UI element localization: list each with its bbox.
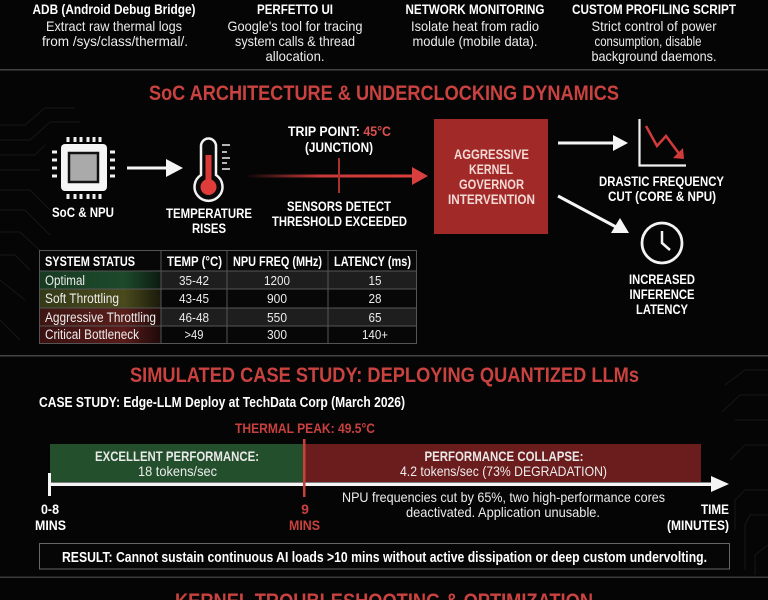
label: drastic frequency cut: [599, 174, 724, 204]
row: critical bottleneck: 140+: [362, 327, 388, 342]
bar: excellent performance: EXCELLENT PERFORMANCE:: [95, 448, 259, 464]
row: critical bottleneck: [45, 327, 388, 342]
label: thermal peak: THERMAL PEAK: 49.5°C: [235, 420, 375, 436]
timeline: performance bars: [50, 444, 701, 482]
label: trip point: (JUNCTION): [305, 140, 373, 155]
arrow: time axis: [48, 473, 729, 496]
row: critical bottleneck: Critical Bottleneck: [45, 327, 139, 342]
row: aggressive throttling: 46-48: [179, 310, 209, 325]
tick label: 9 mins: MINS: [289, 517, 320, 533]
tool: ADB: from /sys/class/thermal/.: [42, 33, 188, 49]
row: aggressive throttling: Aggressive Throttling: [45, 310, 156, 325]
tick label: 9 mins: 9: [301, 501, 309, 517]
icon: falling chart: [640, 119, 686, 166]
note: NPU frequency cut: [342, 489, 665, 520]
row: soft throttling: [45, 291, 382, 306]
label: drastic frequency cut: CUT (CORE & NPU): [608, 189, 716, 204]
bar: performance collapse: [304, 444, 701, 482]
panel: kernel governor box: KERNEL: [469, 162, 513, 177]
axis label: time: TIME: [701, 501, 729, 517]
tool: Perfetto UI: Google's tool for tracing: [228, 18, 362, 34]
panel: kernel governor box: [434, 119, 548, 234]
label: sensors detect: SENSORS DETECT: [287, 199, 392, 214]
label: increased inference latency: INCREASED: [629, 272, 695, 287]
tool: network monitoring: [406, 1, 545, 49]
table header: [45, 254, 411, 269]
tool: network monitoring: module (mobile data).: [412, 33, 538, 49]
label: trip point: TRIP POINT: 45°C: [288, 124, 391, 139]
tick label: 0-8 mins: [35, 501, 66, 533]
tool: Perfetto UI: [228, 1, 362, 64]
label: increased inference latency: [629, 272, 695, 317]
row: optimal: Optimal: [45, 273, 85, 288]
label: SoC & NPU: SoC & NPU: [52, 205, 114, 220]
axis label: time: (MINUTES): [667, 517, 729, 533]
table: system status: [39, 250, 417, 344]
tool: ADB: ADB (Android Debug Bridge): [32, 1, 196, 17]
axis label: time: [667, 501, 729, 533]
panel: kernel governor box: GOVERNOR: [459, 177, 524, 192]
label: increased inference latency: INFERENCE: [630, 287, 694, 302]
heading: case study: SIMULATED CASE STUDY: DEPLOYING QUANTIZED LLMs: [130, 363, 639, 387]
arrow: to latency: [558, 196, 629, 233]
tool: ADB: [32, 1, 196, 49]
callout: result: [40, 544, 730, 569]
icon: chip: [52, 137, 115, 199]
tick label: 0-8 mins: 0-8: [41, 501, 59, 517]
icon: thermometer: [194, 138, 230, 201]
tool: custom profiling script: Strict control of power: [592, 18, 717, 34]
table header: TEMP (°C): [167, 254, 222, 269]
tool: custom profiling script: [572, 1, 736, 64]
bar: performance collapse: 4.2 tokens/sec (73% DEGRADATION): [400, 463, 607, 479]
row: aggressive throttling: 65: [368, 310, 382, 325]
tick label: 9 mins: [289, 501, 320, 533]
bar: excellent performance: 18 tokens/sec: [138, 463, 217, 479]
table header: NPU FREQ (MHz): [233, 254, 322, 269]
tool: Perfetto UI: allocation.: [266, 48, 324, 64]
panel: kernel governor box: AGGRESSIVE: [454, 147, 529, 162]
row: soft throttling: Soft Throttling: [45, 291, 119, 306]
tool: Perfetto UI: PERFETTO UI: [257, 1, 333, 17]
arrow: chip to thermometer: [127, 159, 183, 177]
icon: clock: [642, 223, 682, 263]
row: aggressive throttling: 550: [267, 310, 287, 325]
label: sensors detect: THRESHOLD EXCEEDED: [272, 214, 407, 229]
panel: tools row: [32, 1, 736, 64]
row: optimal: 15: [368, 273, 382, 288]
label: temperature rises: TEMPERATURE: [166, 206, 252, 221]
row: optimal: [45, 273, 382, 288]
row: soft throttling: 28: [368, 291, 382, 306]
row: optimal: 1200: [264, 273, 290, 288]
row: soft throttling: 900: [267, 291, 287, 306]
label: temperature rises: RISES: [192, 221, 226, 236]
row: critical bottleneck: >49: [184, 327, 204, 342]
bar: excellent performance: [50, 444, 304, 482]
tick label: 0-8 mins: MINS: [35, 517, 66, 533]
tool: Perfetto UI: system calls & thread: [235, 33, 355, 49]
label: sensors detect: [272, 199, 407, 229]
arrow: red threshold: [245, 158, 428, 193]
label: trip point: [288, 124, 391, 155]
label: drastic frequency cut: DRASTIC FREQUENCY: [599, 174, 724, 189]
row: critical bottleneck: 300: [267, 327, 287, 342]
heading: SoC architecture: SoC ARCHITECTURE & UNDERCLOCKING DYNAMICS: [149, 82, 619, 105]
subheading: case study name: CASE STUDY: Edge-LLM Deploy at TechData Corp (March 2026): [39, 395, 405, 411]
row: soft throttling: 43-45: [179, 291, 209, 306]
tool: custom profiling script: CUSTOM PROFILING SCRIPT: [572, 1, 736, 17]
tool: network monitoring: Isolate heat from radio: [411, 18, 539, 34]
note: NPU frequency cut: NPU frequencies cut by 65%, two high-performance cores: [342, 489, 665, 505]
table header: SYSTEM STATUS: [45, 254, 135, 269]
label: increased inference latency: LATENCY: [636, 302, 688, 317]
arrow: to frequency cut: [558, 135, 628, 151]
tool: ADB: Extract raw thermal logs: [46, 18, 182, 34]
tool: network monitoring: NETWORK MONITORING: [406, 1, 545, 17]
tool: custom profiling script: background daemons.: [592, 48, 716, 64]
marker: 9 minutes: [303, 439, 306, 497]
bar: performance collapse: PERFORMANCE COLLAPSE:: [424, 448, 584, 464]
row: optimal: 35-42: [179, 273, 209, 288]
tool: custom profiling script: consumption, disable: [594, 33, 702, 49]
note: NPU frequency cut: deactivated. Application unusable.: [406, 504, 600, 520]
panel: kernel governor box: INTERVENTION: [448, 192, 535, 207]
label: temperature rises: [166, 206, 252, 236]
row: aggressive throttling: [45, 310, 382, 325]
table header: LATENCY (ms): [334, 254, 411, 269]
